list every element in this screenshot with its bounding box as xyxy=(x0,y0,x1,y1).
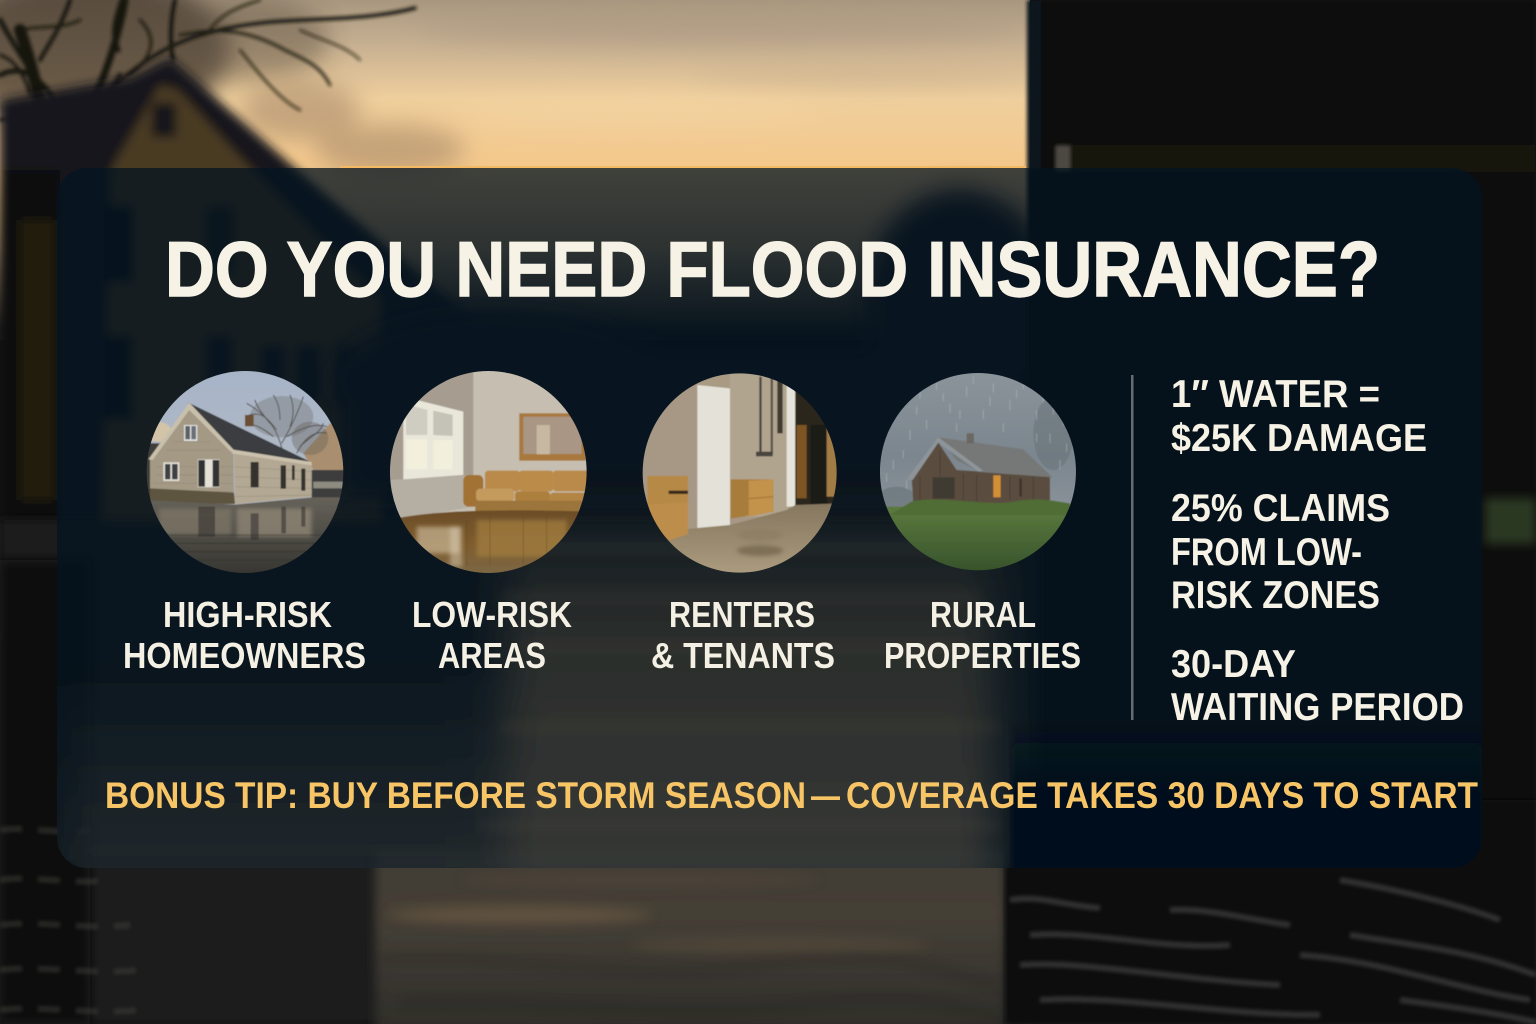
label: & TENANTS xyxy=(651,635,835,676)
label xyxy=(123,594,366,676)
bare tree branches xyxy=(0,0,415,210)
label: HIGH-RISK xyxy=(163,594,332,635)
bonus tip: — xyxy=(811,775,840,816)
flood water xyxy=(0,498,1536,1024)
label: AREAS xyxy=(438,635,546,676)
stat: low-risk claims: FROM LOW- xyxy=(1171,531,1362,574)
stat: low-risk claims xyxy=(1171,487,1390,617)
blurred tree canopy at top left xyxy=(0,0,330,130)
panel: main translucent card xyxy=(57,168,1482,890)
stat: waiting period: WAITING PERIOD xyxy=(1171,686,1464,729)
bonus tip xyxy=(105,775,1478,816)
bonus tip: BONUS TIP: BUY BEFORE STORM SEASON xyxy=(105,775,806,816)
label: RENTERS xyxy=(669,594,815,635)
label xyxy=(651,594,835,676)
label: LOW-RISK xyxy=(412,594,572,635)
stat: low-risk claims: RISK ZONES xyxy=(1171,574,1380,617)
stat: waiting period: 30-DAY xyxy=(1171,643,1296,686)
photo: flooded living room xyxy=(387,367,593,580)
photo: barn in rain xyxy=(877,370,1080,577)
label xyxy=(884,594,1081,676)
label xyxy=(412,594,572,676)
bonus tip: COVERAGE TAKES 30 DAYS TO START xyxy=(846,775,1478,816)
dark trees behind the card xyxy=(330,190,1055,500)
audience: low-risk areas xyxy=(387,367,593,676)
stat: water damage cost: $25K DAMAGE xyxy=(1171,417,1427,460)
sunset sky xyxy=(0,0,1030,340)
water ripples xyxy=(380,958,1000,1018)
stat: water damage cost xyxy=(1171,373,1427,460)
audience: rural properties xyxy=(877,370,1081,676)
house silhouette xyxy=(0,58,520,640)
label: RURAL xyxy=(930,594,1036,635)
photo: flooded house xyxy=(146,371,344,573)
audience: high-risk homeowners xyxy=(123,367,366,676)
title: DO YOU NEED FLOOD INSURANCE? xyxy=(165,225,1380,313)
warm water streaks xyxy=(390,874,930,953)
dark building at right xyxy=(1027,0,1536,1024)
stat: waiting period xyxy=(1171,643,1464,729)
stat: water damage cost: 1″ WATER = xyxy=(1171,373,1380,416)
photo: flooded storage room xyxy=(640,370,840,577)
label: HOMEOWNERS xyxy=(123,635,366,676)
audience: renters and tenants xyxy=(640,370,840,676)
stat: low-risk claims: 25% CLAIMS xyxy=(1171,487,1390,530)
label: PROPERTIES xyxy=(884,635,1081,676)
